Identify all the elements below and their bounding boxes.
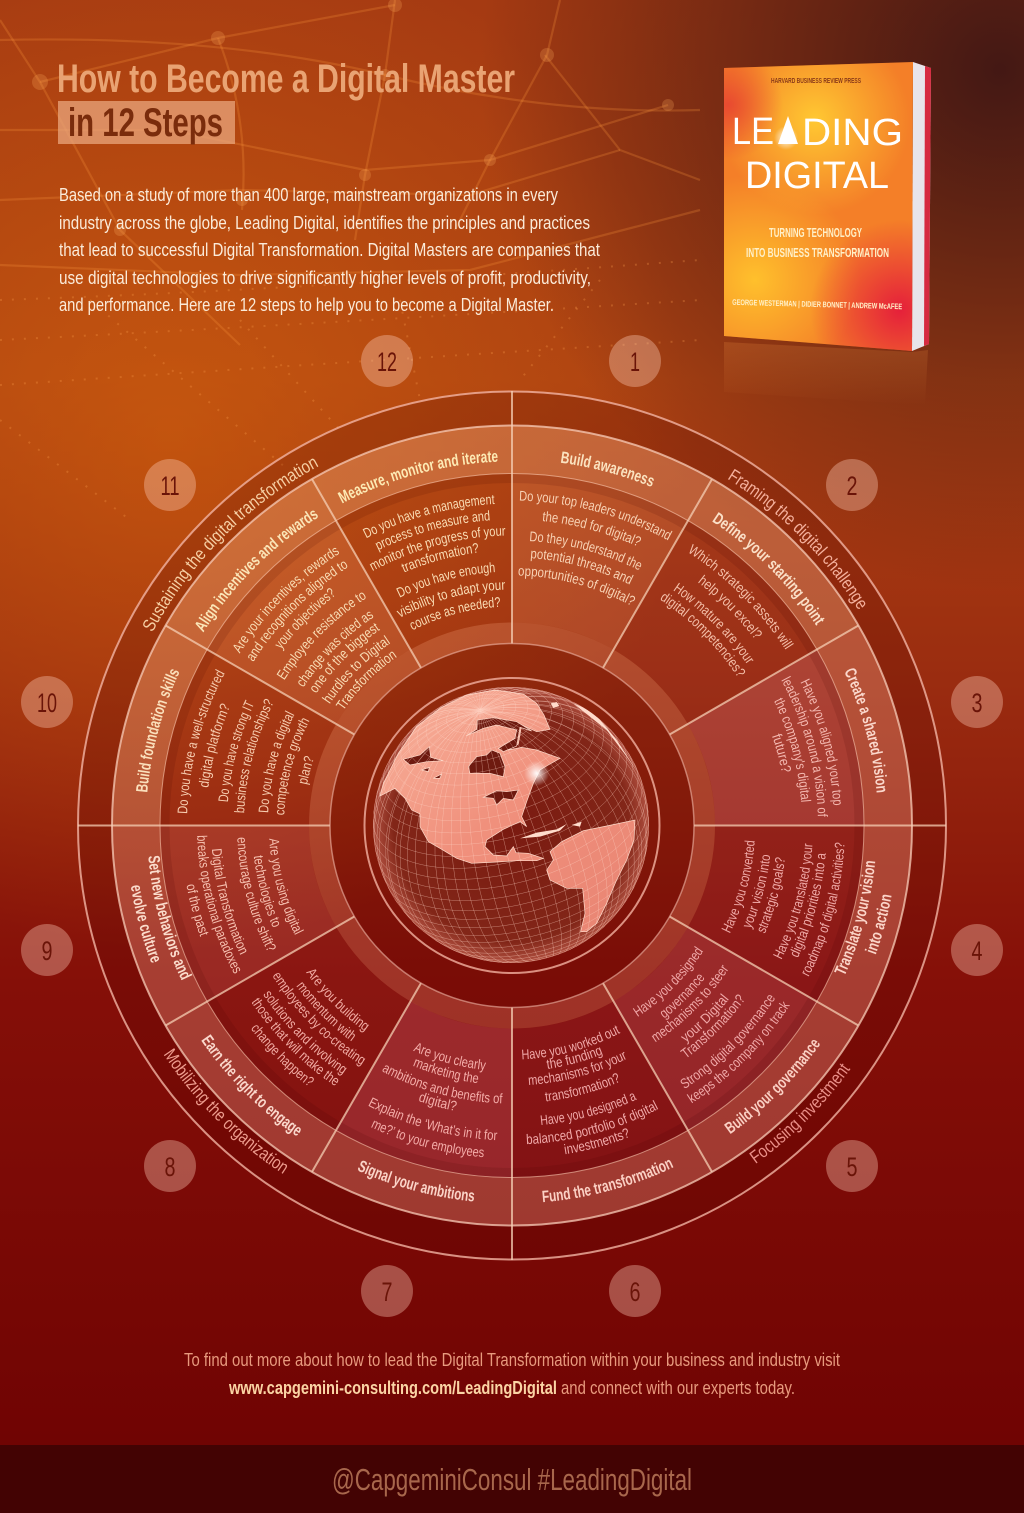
step 9: Set new behaviors and evolve culture: of the past xyxy=(183,882,213,938)
step 7: Signal your ambitions: Explain the ‘What’s in it for xyxy=(366,1094,498,1143)
step 6: Fund the transformation: the funding xyxy=(546,1047,603,1069)
step 1: Build awareness: potential threats and xyxy=(530,550,634,584)
step 11: Align incentives and rewards: hurdles to Digital xyxy=(319,632,392,706)
step 8: Earn the right to engage: solutions and involving xyxy=(260,987,350,1077)
book: Leading Digital: DING xyxy=(802,112,903,154)
number badges 1 to 12: 9 xyxy=(42,936,52,966)
category label: Framing the digital challenge: Framing the digital challenge xyxy=(728,468,866,609)
step 10: Build foundation skills: digital platform? xyxy=(195,701,233,788)
step 4: Translate your vision into action: Have you translated your xyxy=(773,844,814,960)
step 1: Build awareness: Build awareness xyxy=(560,452,654,486)
step 4: Translate your vision into action: roadmap of digital activities? xyxy=(802,842,844,976)
step 5: Build your governance: mechanisms to steer xyxy=(652,964,728,1042)
step 2: Define your starting point xyxy=(660,480,858,676)
step 9: Set new behaviors and evolve culture: evolve culture xyxy=(127,883,165,965)
category label: Mobilizing the organization: Mobilizing the organization xyxy=(164,1048,288,1174)
number badges 1 to 12: 7 xyxy=(382,1277,392,1307)
number badges 1 to 12: 3 xyxy=(972,688,982,718)
step 4: Translate your vision into action: digital priorities into a xyxy=(790,853,826,957)
step 10: Build foundation skills: Build foundation skills xyxy=(133,666,183,793)
title xyxy=(57,57,515,145)
step 8: Earn the right to engage: employees by co-creating xyxy=(270,969,369,1068)
number badges 1 to 12: 5 xyxy=(846,1152,858,1182)
step 8: Earn the right to engage: Earn the right to engage xyxy=(198,1032,305,1140)
step 4: Translate your vision into action: your vision into xyxy=(744,855,770,930)
step 2: Define your starting point: Define your starting point xyxy=(712,512,824,626)
book: Leading Digital: DIGITAL xyxy=(745,155,889,197)
step 3: Create a shared vision: leadership around a vision of xyxy=(782,676,828,817)
step 3: Create a shared vision: Create a shared vision xyxy=(845,668,887,792)
step 10: Build foundation skills: Do you have strong IT xyxy=(215,698,257,803)
number badges 1 to 12: 4 xyxy=(972,936,982,966)
wheel base rings xyxy=(78,392,946,1260)
step 12: Measure, monitor and iterate: Measure, monitor and iterate xyxy=(336,448,498,507)
step 11: Align incentives and rewards: Transformation xyxy=(333,646,399,713)
category label: Focusing investment: Focusing investment xyxy=(749,1064,850,1164)
number badges 1 to 12: 11 xyxy=(160,471,180,501)
step 3: Create a shared vision: future? xyxy=(772,734,791,772)
step 11: Align incentives and rewards: one of the biggest xyxy=(306,619,382,695)
step 4: Translate your vision into action xyxy=(688,826,912,1024)
step 1: Build awareness: opportunities of digital? xyxy=(518,568,636,605)
step 12: Measure, monitor and iterate: monitor the progress of your xyxy=(366,523,506,574)
step 8: Earn the right to engage xyxy=(166,928,409,1171)
step 2: Define your starting point: How mature are your xyxy=(674,582,754,664)
step 9: Set new behaviors and evolve culture: Are you using digital xyxy=(266,838,307,937)
closing call to action xyxy=(184,1350,840,1398)
closing call to action: To find out more about how to lead the Digital Transformation within your business and industry visit xyxy=(184,1350,840,1370)
step 7: Signal your ambitions: Are you clearly xyxy=(412,1039,487,1073)
step 11: Align incentives and rewards: change was cited as xyxy=(293,606,376,689)
central dark disk xyxy=(330,644,694,1008)
step 3: Create a shared vision xyxy=(688,626,912,826)
step 6: Fund the transformation: transformation? xyxy=(544,1069,622,1104)
step 2: Define your starting point: digital competencies? xyxy=(660,593,746,676)
step 1: Build awareness: the need for digital? xyxy=(542,511,641,546)
number badges 1 to 12: 10 xyxy=(37,688,57,718)
step 6: Fund the transformation xyxy=(512,1002,711,1226)
step 10: Build foundation skills: Do you have a digital xyxy=(255,708,297,813)
book: Leading Digital: TURNING TECHNOLOGY xyxy=(769,226,862,240)
step 10: Build foundation skills xyxy=(112,626,314,826)
step 11: Align incentives and rewards: Employee resistance to xyxy=(273,587,369,682)
step 12: Measure, monitor and iterate: Do you have enough xyxy=(394,559,496,600)
step 9: Set new behaviors and evolve culture: encourage culture shift? xyxy=(234,837,280,954)
category label: Sustaining the digital transformation: Sustaining the digital transformation xyxy=(143,458,318,631)
step 6: Fund the transformation: Have you worked out xyxy=(522,1025,620,1060)
step 11: Align incentives and rewards: your objectives? xyxy=(271,584,338,652)
step 10: Build foundation skills: Do you have a well-structured xyxy=(174,667,228,814)
step 6: Fund the transformation: investments? xyxy=(563,1124,632,1157)
step 11: Align incentives and rewards: Are your incentives, rewards xyxy=(229,542,342,655)
step 8: Earn the right to engage: those that will make the xyxy=(249,995,343,1089)
step 3: Create a shared vision: the company's digital xyxy=(774,698,812,802)
step 5: Build your governance: your Digital xyxy=(681,993,729,1045)
step 12: Measure, monitor and iterate xyxy=(313,426,512,630)
step 2: Define your starting point: help you excel? xyxy=(698,574,762,638)
number badges 1 to 12 xyxy=(21,335,1003,1317)
step 6: Fund the transformation: Fund the transformation xyxy=(542,1160,674,1202)
step 9: Set new behaviors and evolve culture xyxy=(112,826,336,1024)
step 7: Signal your ambitions: me?’ to your employees xyxy=(369,1115,485,1160)
step 6: Fund the transformation: Have you designed a xyxy=(539,1087,638,1128)
step 9: Set new behaviors and evolve culture: breaks operational paradoxes xyxy=(194,835,246,976)
closing call to action: www.capgemini-consulting.com/LeadingDigital xyxy=(228,1378,557,1398)
step 1: Build awareness: Do your top leaders understand xyxy=(520,490,672,540)
book: Leading Digital: INTO BUSINESS TRANSFORMATION xyxy=(746,246,889,260)
step 4: Translate your vision into action: Translate your vision xyxy=(834,861,876,974)
book: Leading Digital xyxy=(724,60,931,405)
intro paragraph: that lead to successful Digital Transformation. Digital Masters are companies that xyxy=(59,240,600,260)
closing call to action: and connect with our experts today. xyxy=(561,1378,795,1398)
step 4: Translate your vision into action: into action xyxy=(864,894,892,954)
step 1: Build awareness: Do they understand the xyxy=(530,532,642,570)
step 5: Build your governance: Have you designed xyxy=(632,946,704,1017)
step 7: Signal your ambitions: digital? xyxy=(417,1089,459,1114)
step 11: Align incentives and rewards: Align incentives and rewards xyxy=(192,505,321,635)
book: Leading Digital: LE xyxy=(732,111,774,153)
step 12: Measure, monitor and iterate: transformation? xyxy=(399,540,480,575)
step 10: Build foundation skills: plan? xyxy=(294,754,317,786)
step 8: Earn the right to engage: Are you building xyxy=(304,965,373,1034)
step 7: Signal your ambitions xyxy=(313,1002,512,1226)
step 5: Build your governance: Build your governance xyxy=(724,1040,820,1134)
step 5: Build your governance: governance xyxy=(660,974,704,1020)
step 9: Set new behaviors and evolve culture: Set new behaviors and xyxy=(144,855,194,983)
step 4: Translate your vision into action: Have you converted xyxy=(722,840,755,933)
step 5: Build your governance xyxy=(614,928,858,1171)
step 11: Align incentives and rewards: and recognitions aligned to xyxy=(242,556,350,664)
step 7: Signal your ambitions: ambitions and benefits of xyxy=(380,1059,503,1106)
number badges 1 to 12: 12 xyxy=(377,347,397,377)
step 6: Fund the transformation: mechanisms for your xyxy=(528,1052,626,1085)
book: Leading Digital: GEORGE WESTERMAN | DIDIER BONNET | ANDREW McAFEE xyxy=(732,298,903,311)
step 9: Set new behaviors and evolve culture: technologies to xyxy=(251,854,285,930)
number badges 1 to 12: 1 xyxy=(630,347,640,377)
step 8: Earn the right to engage: change happen? xyxy=(248,1020,317,1089)
step 12: Measure, monitor and iterate: course as needed? xyxy=(407,594,501,633)
step 10: Build foundation skills: business relationships? xyxy=(231,696,277,814)
step 1: Build awareness xyxy=(512,426,711,649)
step 5: Build your governance: Strong digital governance xyxy=(680,995,774,1088)
intro paragraph: Based on a study of more than 400 large, mainstream organizations in every xyxy=(59,185,558,205)
book: Leading Digital: HARVARD BUSINESS REVIEW PRESS xyxy=(771,78,861,85)
step 9: Set new behaviors and evolve culture: Digital Transformation xyxy=(209,848,252,957)
step 6: Fund the transformation: balanced portfolio of digital xyxy=(526,1097,660,1147)
intro paragraph: and performance. Here are 12 steps to help you to become a Digital Master. xyxy=(59,295,554,315)
intro paragraph: industry across the globe, Leading Digital, identifies the principles and practices xyxy=(59,213,590,233)
step 4: Translate your vision into action: strategic goals? xyxy=(758,857,785,934)
step 2: Define your starting point: Which strategic assets will xyxy=(690,544,794,650)
step 12: Measure, monitor and iterate: Do you have a management xyxy=(360,491,495,541)
intro paragraph: use digital technologies to drive significantly higher levels of profit, productivity, xyxy=(59,268,591,288)
step 7: Signal your ambitions: marketing the xyxy=(411,1054,480,1086)
number badges 1 to 12: 6 xyxy=(630,1277,640,1307)
intro paragraph xyxy=(59,185,600,315)
step 5: Build your governance: keeps the company on track xyxy=(686,1001,790,1104)
step 11: Align incentives and rewards xyxy=(166,480,410,723)
step 10: Build foundation skills: competence growth xyxy=(271,715,312,816)
number badges 1 to 12: 8 xyxy=(164,1152,176,1182)
step 12: Measure, monitor and iterate: visibility to adapt your xyxy=(394,577,506,620)
title: in 12 Steps xyxy=(68,101,223,145)
step 12: Measure, monitor and iterate: process to measure and xyxy=(372,507,491,553)
step 8: Earn the right to engage: momentum with xyxy=(294,978,360,1044)
step 5: Build your governance: Transformation? xyxy=(680,994,744,1058)
wheel rings and spokes xyxy=(78,391,946,1260)
title: How to Become a Digital Master xyxy=(57,57,515,101)
globe xyxy=(373,687,649,963)
step 7: Signal your ambitions: Signal your ambitions xyxy=(355,1157,476,1206)
footer hashtags: @CapgeminiConsul #LeadingDigital xyxy=(332,1462,692,1497)
number badges 1 to 12: 2 xyxy=(846,471,858,501)
step 3: Create a shared vision: Have you aligned your top xyxy=(800,678,842,806)
